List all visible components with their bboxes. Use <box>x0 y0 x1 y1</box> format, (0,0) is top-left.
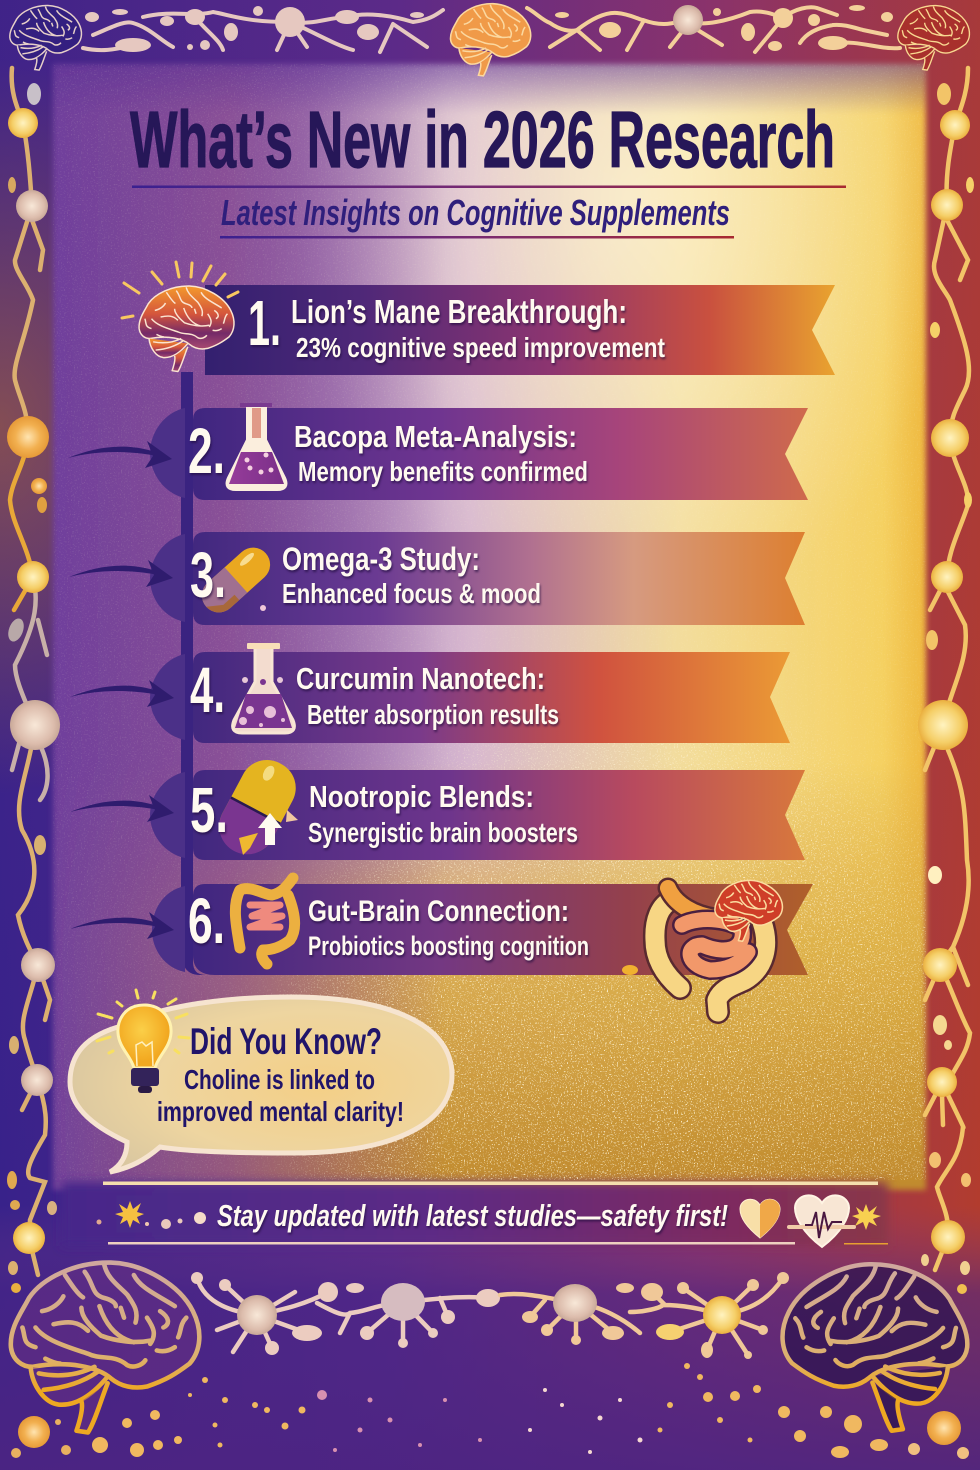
heading 5: Nootropic Blends: <box>309 779 534 814</box>
heading 2: Bacopa Meta-Analysis: <box>294 419 577 454</box>
icon: capsule with arrow <box>209 750 305 864</box>
callout: did you know <box>70 990 452 1172</box>
heading 4: Curcumin Nanotech: <box>296 661 545 696</box>
decorative speckle <box>53 64 926 1180</box>
number 3: 3. <box>190 539 226 611</box>
speech bubble <box>70 997 452 1172</box>
banner 3 <box>193 532 805 625</box>
icon: gut <box>235 878 295 964</box>
icon: gut and brain illustration <box>622 880 782 1012</box>
banner 5 <box>193 770 805 860</box>
number 6: 6. <box>188 885 225 957</box>
footer rule right <box>844 1243 888 1244</box>
icon: heartbeat heart <box>787 1195 856 1247</box>
callout line 2: improved mental clarity! <box>157 1096 404 1127</box>
description 1: 23% cognitive speed improvement <box>296 332 665 363</box>
banner 4 <box>193 652 790 743</box>
banner 6 <box>193 884 813 975</box>
banner 2 <box>193 408 808 500</box>
bump 5 <box>150 772 185 858</box>
bottom gold and pink speckles <box>92 1363 888 1458</box>
callout heading: Did You Know? <box>190 1021 382 1062</box>
icon: bottom left brain outline <box>11 1263 199 1432</box>
icon: gold burst <box>852 1204 881 1230</box>
top vine leaves left <box>85 6 424 52</box>
left border leaves and nodes <box>5 83 60 1293</box>
bump 2 <box>150 408 185 498</box>
icon: top centre brain <box>450 4 531 76</box>
heading 3: Omega-3 Study: <box>282 541 480 577</box>
bottom corner nodes <box>11 1411 969 1459</box>
bottom neuron nodes right <box>522 1272 789 1359</box>
timeline spine <box>181 372 206 975</box>
description 3: Enhanced focus & mood <box>282 578 541 609</box>
left vine border <box>10 68 50 1275</box>
right border leaves and nodes <box>918 83 974 1294</box>
item 4: Curcumin <box>150 643 790 743</box>
item 2: Bacopa <box>150 403 808 500</box>
icon: glowing brain <box>122 262 238 372</box>
description 6: Probiotics boosting cognition <box>308 931 589 961</box>
arrow to item 5 <box>70 795 174 822</box>
footer rule top <box>103 1182 878 1185</box>
arrow to item 6 <box>70 912 174 939</box>
bottom neuron vine left <box>197 1278 488 1352</box>
bottom neuron vine right <box>500 1278 783 1355</box>
panel: central glowing background <box>53 64 926 1190</box>
description 2: Memory benefits confirmed <box>298 456 588 487</box>
item 3: Omega-3 <box>150 532 805 625</box>
icon: flask <box>228 403 285 489</box>
bump 4 <box>150 654 185 740</box>
icon: top left brain <box>10 6 81 70</box>
bottom neuron nodes left <box>191 1272 500 1355</box>
icon: bottom right brain outline <box>783 1264 967 1431</box>
icon: top right brain <box>898 6 969 70</box>
item 5: Nootropic <box>150 750 805 864</box>
right vine border <box>925 68 970 1270</box>
item 6: Gut-Brain <box>152 878 813 975</box>
description 5: Synergistic brain boosters <box>308 817 578 848</box>
icon: light bulb <box>97 990 189 1093</box>
number 5: 5. <box>190 774 228 846</box>
icon: gold heart <box>740 1199 780 1238</box>
top vine leaves right <box>555 5 893 51</box>
top vine border left <box>83 10 443 52</box>
footer rule bottom <box>108 1242 795 1244</box>
arrow to item 4 <box>70 680 174 707</box>
bump 6 <box>152 886 185 972</box>
number 1: 1. <box>248 287 281 359</box>
number 2: 2. <box>188 415 225 487</box>
subtitle: Latest Insights on Cognitive Supplements <box>221 192 730 233</box>
heading 1: Lion’s Mane Breakthrough: <box>291 293 627 330</box>
arrow to item 2 <box>68 441 172 468</box>
footer text: Stay updated with latest studies—safety first! <box>217 1198 728 1233</box>
bump 3 <box>150 534 185 622</box>
callout line 1: Choline is linked to <box>184 1064 375 1095</box>
arrow to item 3 <box>69 560 173 587</box>
icon: sparkle and dots <box>96 1201 206 1229</box>
title rule <box>132 186 846 188</box>
item 1: Lion's Mane <box>122 262 835 375</box>
banner 1 <box>205 285 835 375</box>
icon: flask <box>233 643 294 733</box>
description 4: Better absorption results <box>307 699 559 730</box>
icon: capsule <box>195 541 277 619</box>
heading 6: Gut-Brain Connection: <box>308 895 569 928</box>
number 4: 4. <box>190 654 225 726</box>
subtitle rule <box>220 236 734 238</box>
top vine border right <box>527 7 900 52</box>
footer band <box>62 1182 888 1246</box>
